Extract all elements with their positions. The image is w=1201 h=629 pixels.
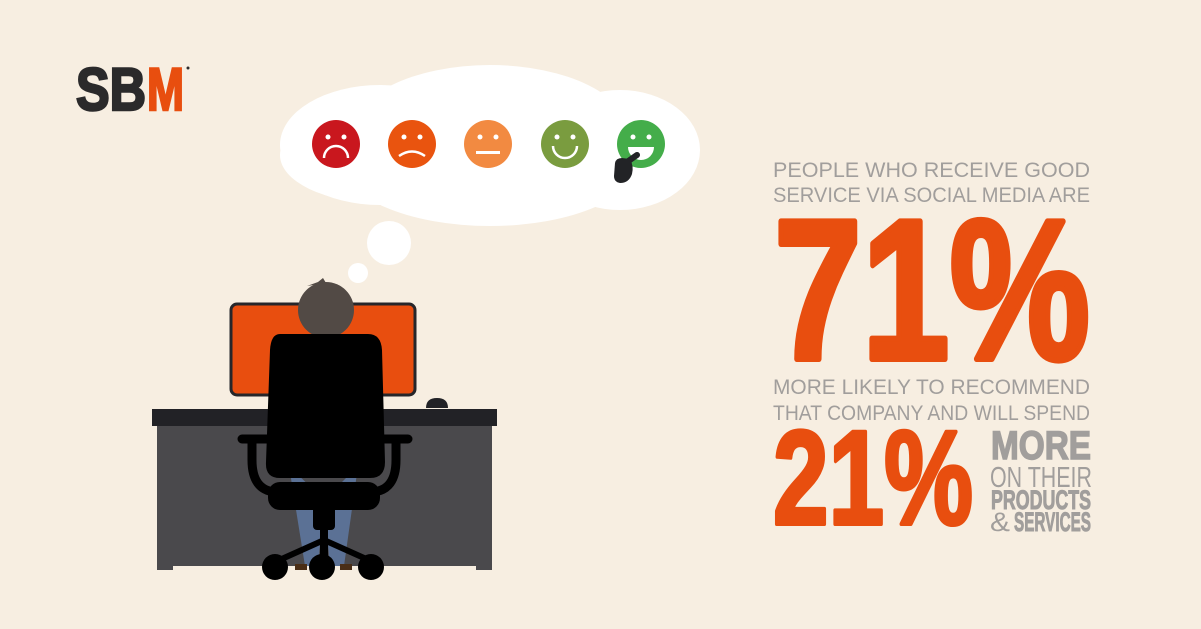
middle text: MORE LIKELY TO RECOMMEND xyxy=(773,376,1090,399)
intro text: SERVICE VIA SOCIAL MEDIA ARE xyxy=(773,184,1090,207)
middle text xyxy=(773,376,1090,425)
side text: MORE xyxy=(991,424,1091,468)
person on office chair xyxy=(242,278,408,580)
face: happy xyxy=(541,120,589,168)
side text: SERVICES xyxy=(1014,507,1091,537)
middle text: THAT COMPANY AND WILL SPEND xyxy=(773,402,1090,425)
logo: SBM: SB xyxy=(76,56,146,123)
side text: & xyxy=(990,507,1010,537)
logo: SBM: M xyxy=(147,56,184,123)
big number 71%: 71% xyxy=(774,179,1090,402)
statistic text block xyxy=(773,159,1092,553)
side text xyxy=(990,424,1092,537)
face: neutral xyxy=(464,120,512,168)
face: very unhappy xyxy=(312,120,360,168)
side text: ON THEIR xyxy=(990,462,1092,494)
intro text xyxy=(773,159,1090,207)
face: unhappy xyxy=(388,120,436,168)
intro text: PEOPLE WHO RECEIVE GOOD xyxy=(773,159,1090,182)
side text: PRODUCTS xyxy=(991,485,1091,515)
desk with monitor xyxy=(152,304,497,570)
face: very happy with pointing hand xyxy=(614,120,665,183)
big number 21%: 21% xyxy=(773,404,973,553)
thought bubble with rating faces xyxy=(280,65,700,283)
